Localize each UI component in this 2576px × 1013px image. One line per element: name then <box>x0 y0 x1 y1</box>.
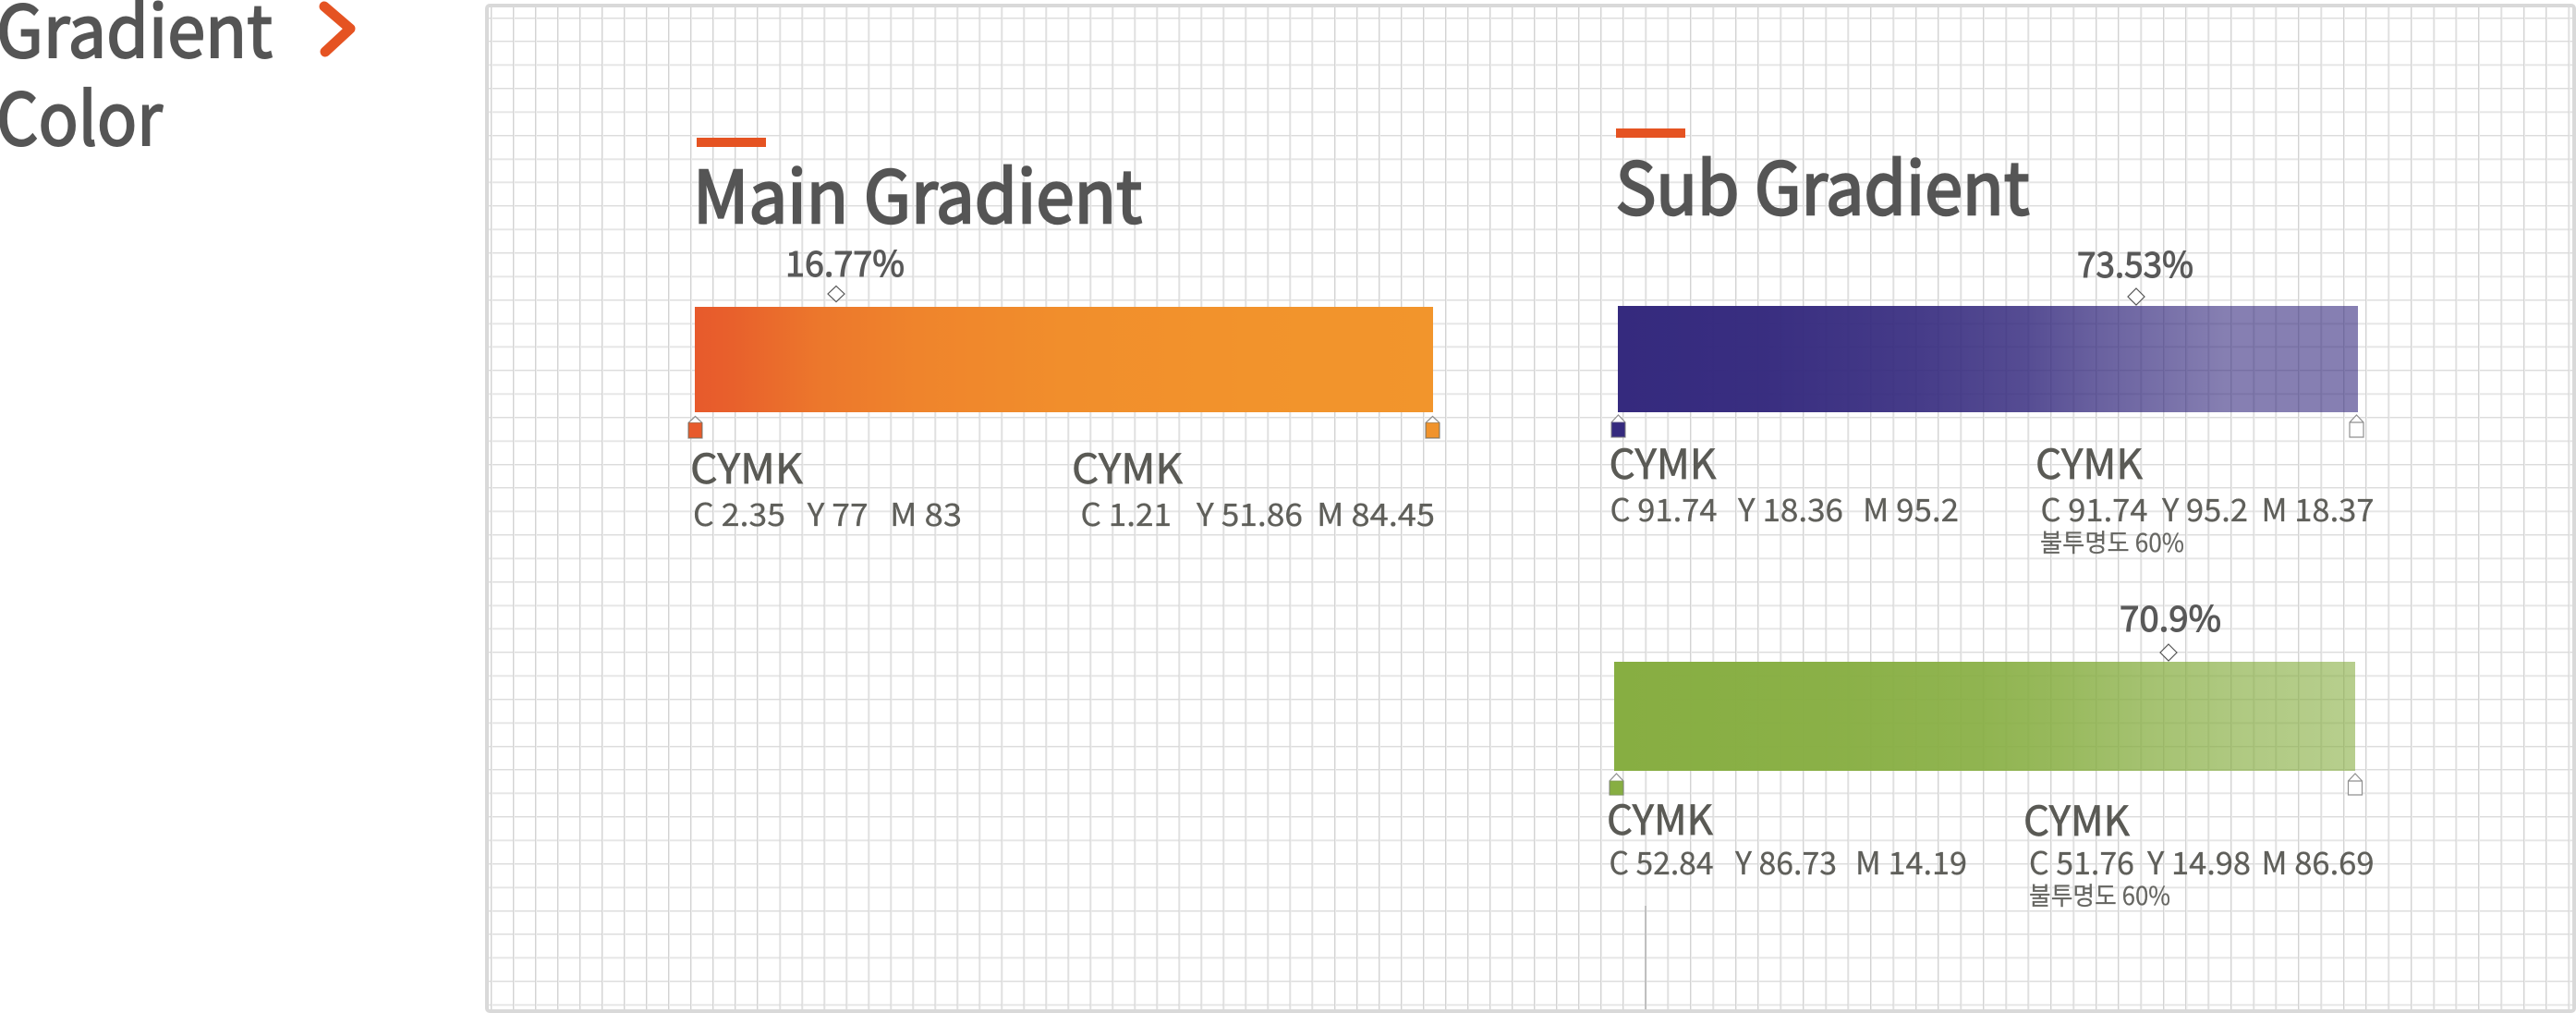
icon: orange chevron arrow <box>324 6 350 52</box>
gradient bar: orange <box>695 307 1433 412</box>
label: left CYMK: CYMK <box>1610 432 1717 491</box>
midpoint label: 16.77% <box>785 236 905 287</box>
panel: sub gradient purple <box>1610 128 2375 559</box>
values: left CYMK <box>1610 838 1967 884</box>
values: right CYMK: Y 14.98 <box>2146 838 2251 884</box>
values: right CYMK: C 51.76 <box>2029 838 2134 884</box>
note: opacity 60%: 불투명도 60% <box>2040 523 2184 559</box>
values: left CYMK <box>693 490 962 535</box>
midpoint diamond <box>828 287 844 301</box>
accent bar <box>1616 128 1685 138</box>
values: right CYMK: M 84.45 <box>1317 490 1435 535</box>
values: left CYMK: M 83 <box>890 490 962 535</box>
values: right CYMK: M 18.37 <box>2262 485 2375 531</box>
midpoint diamond <box>2128 288 2145 305</box>
left colour stop <box>1611 415 1625 437</box>
accent bar <box>697 138 766 147</box>
values: right CYMK <box>1081 490 1435 535</box>
panel: sub gradient green <box>1607 591 2375 912</box>
values: right CYMK: C 91.74 <box>2040 485 2147 531</box>
label: left CYMK: CYMK <box>1607 787 1714 847</box>
values: left CYMK: Y 86.73 <box>1734 838 1837 884</box>
heading: Main Gradient: Main Gradient <box>693 140 1142 244</box>
right colour stop <box>2350 415 2363 437</box>
gradient bar: green <box>1614 662 2355 771</box>
label: right CYMK: CYMK <box>2023 788 2131 848</box>
label: right CYMK: CYMK <box>1072 436 1184 495</box>
note: opacity 60%: 불투명도 60% <box>2029 876 2170 912</box>
heading: Gradient Color <box>0 0 273 166</box>
values: left CYMK: Y 77 <box>807 490 869 535</box>
right colour stop <box>1426 416 1440 438</box>
values: left CYMK: M 14.19 <box>1855 838 1967 884</box>
values: left CYMK: M 95.2 <box>1863 485 1959 531</box>
values: left CYMK: C 52.84 <box>1610 838 1713 884</box>
right colour stop <box>2349 774 2362 795</box>
left colour stop <box>1610 774 1623 795</box>
heading: Sub Gradient: Sub Gradient <box>1615 132 2029 236</box>
label: left CYMK: CYMK <box>690 436 804 495</box>
left colour stop <box>688 416 702 438</box>
vertical guide line near bottom <box>1645 906 1646 1009</box>
values: left CYMK: C 2.35 <box>693 490 785 535</box>
values: right CYMK <box>2029 838 2375 884</box>
values: right CYMK: Y 51.86 <box>1196 490 1303 535</box>
values: right CYMK: C 1.21 <box>1081 490 1172 535</box>
panel: main gradient <box>688 138 1440 535</box>
values: right CYMK <box>2040 485 2375 531</box>
values: left CYMK <box>1610 485 1959 531</box>
heading: Gradient Color: Color <box>0 63 164 166</box>
midpoint label: 70.9% <box>2120 591 2221 641</box>
midpoint diamond <box>2160 644 2177 661</box>
label: right CYMK: CYMK <box>2035 432 2144 491</box>
values: right CYMK: Y 95.2 <box>2161 485 2248 531</box>
values: left CYMK: C 91.74 <box>1610 485 1717 531</box>
gradient bar: purple <box>1618 306 2358 412</box>
values: left CYMK: Y 18.36 <box>1737 485 1843 531</box>
values: right CYMK: M 86.69 <box>2262 838 2375 884</box>
midpoint label: 73.53% <box>2077 237 2193 287</box>
